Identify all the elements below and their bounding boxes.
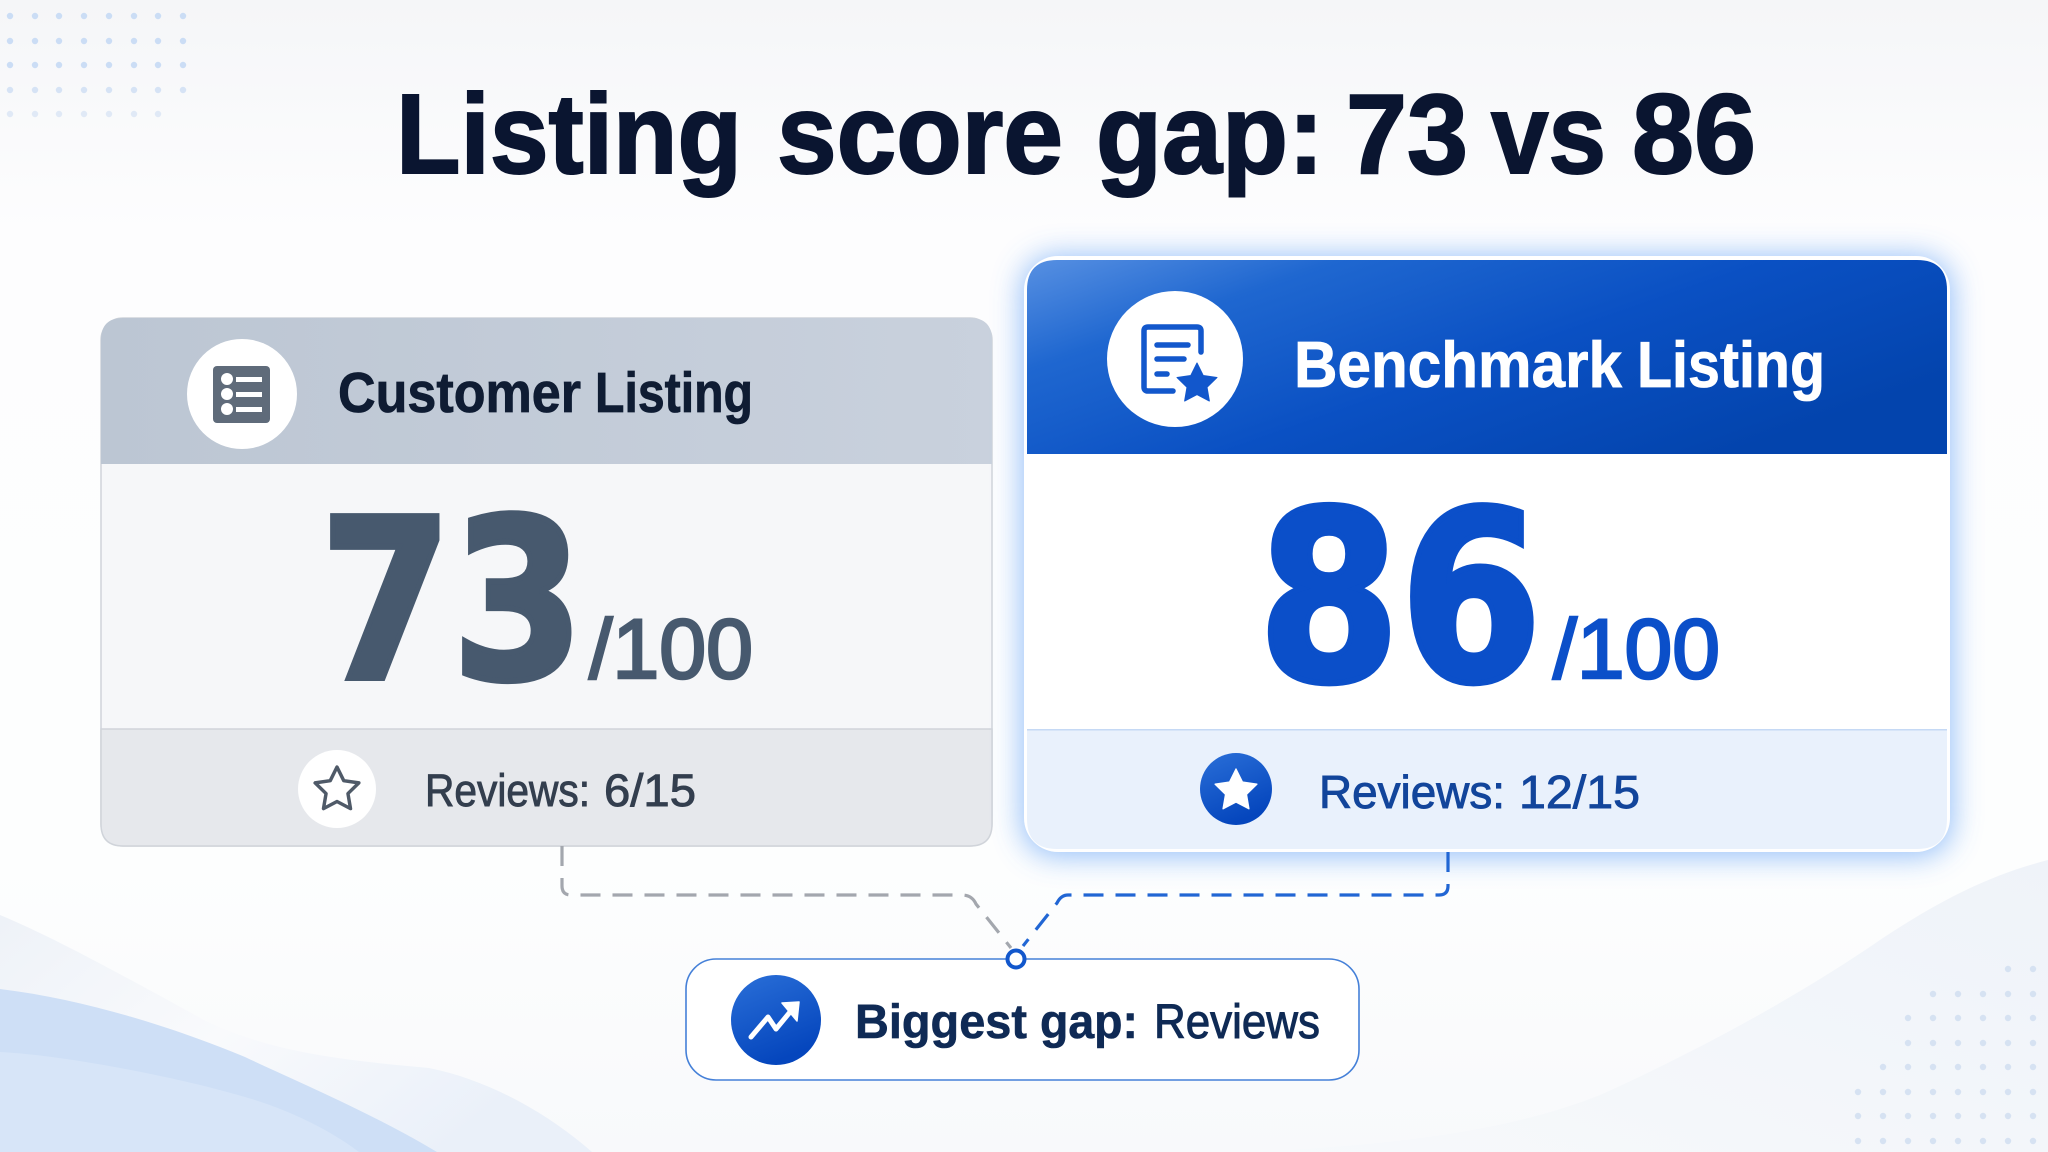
customer reviews: 6/15 [604,765,696,816]
callout text [855,996,1138,1049]
customer score: 73 [320,473,584,731]
customer score denominator: /100 [589,602,753,696]
benchmark card header band [1027,260,1947,454]
benchmark score: 86 [1258,461,1542,736]
panel: customer listing [101,318,992,846]
callout pill [686,959,1359,1080]
background waves: bottom left [0,915,592,1152]
benchmark card body [1024,256,1950,852]
customer listing heading [338,361,753,425]
customer card body [101,318,992,846]
title: vs [1491,71,1606,197]
benchmark listing heading: Listing [1637,328,1825,401]
customer card footer band [101,729,992,846]
benchmark listing heading: Benchmark [1294,328,1623,401]
callout text: reviews: Reviews [1154,996,1320,1049]
connector: benchmark to callout [1023,852,1448,946]
dot grid: top left [10,16,183,114]
benchmark reviews: Reviews: [1319,766,1505,818]
panel: benchmark listing [1024,256,1950,852]
title: score [777,71,1063,197]
title: 86 [1632,71,1756,197]
customer reviews: Reviews: [425,765,590,816]
title: gap: [1096,71,1324,197]
icon: list [187,339,297,449]
title [396,71,1756,197]
benchmark reviews: 12/15 [1519,766,1640,818]
benchmark card footer band [1027,729,1947,849]
icon: filled star [1200,753,1272,825]
title: Listing [396,71,742,197]
icon: outline star [298,750,376,828]
icon: trend arrow [731,975,821,1065]
callout: biggest gap [686,950,1359,1080]
background wave: bottom right [1250,860,2048,1152]
footer divider [1027,729,1947,730]
icon: document with star [1107,291,1243,427]
customer card header band [101,318,992,464]
dot grid: bottom right [1858,969,2033,1141]
glow behind benchmark card [1022,256,1952,856]
customer reviews [425,765,696,816]
callout text: Biggest [855,996,1027,1049]
benchmark reviews [1319,766,1640,818]
callout text: gap: [1040,996,1138,1049]
customer listing heading: Customer [338,361,581,425]
benchmark score denominator: /100 [1553,602,1720,696]
connector node [1008,950,1024,968]
benchmark listing heading [1294,328,1825,401]
customer listing heading: Listing [595,361,753,425]
title: 73 [1346,71,1468,197]
connector: customer to callout [562,846,1011,948]
